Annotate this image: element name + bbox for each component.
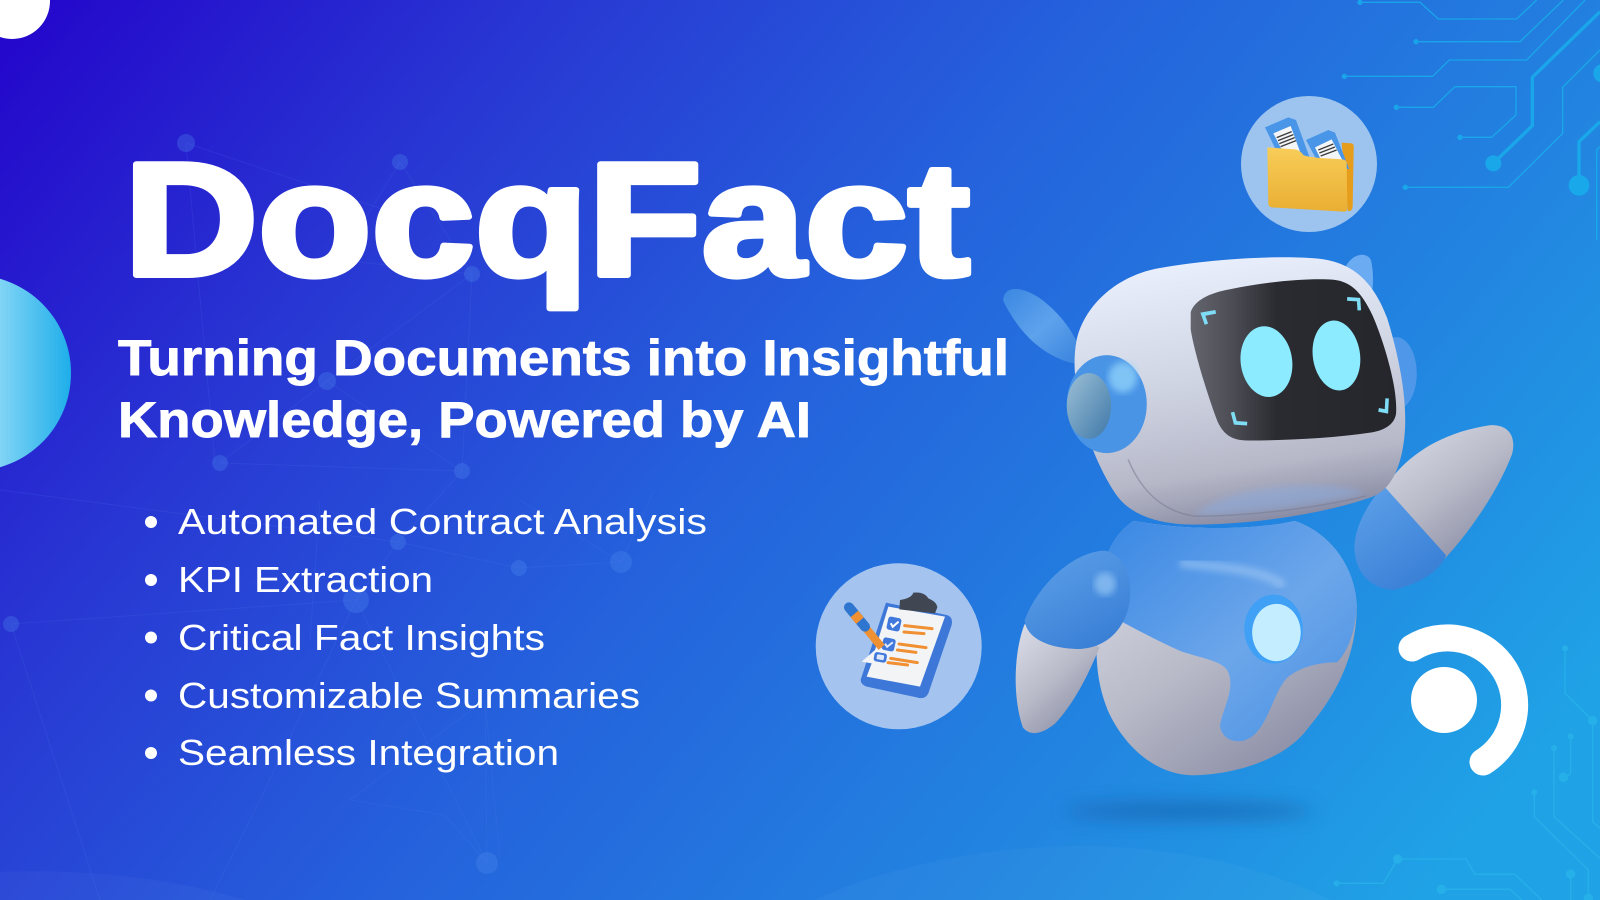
robot body — [1096, 521, 1357, 775]
icon: folder badge — [1241, 96, 1377, 232]
subtitle — [118, 330, 1009, 448]
robot eyes — [1235, 316, 1365, 401]
feature list: Seamless Integration — [178, 732, 559, 773]
feature list — [145, 501, 707, 773]
shadow under robot — [1064, 802, 1314, 820]
robot rear antenna — [1345, 255, 1373, 303]
circuit lines top right — [1342, 0, 1600, 240]
feature list: KPI Extraction — [178, 559, 433, 600]
feature list: Critical Fact Insights — [178, 617, 545, 658]
robot illustration — [1003, 255, 1513, 775]
bottom background waves — [0, 846, 1330, 900]
robot side ear — [1067, 355, 1147, 453]
robot rear ear — [1375, 337, 1417, 410]
decorative cyan circle — [0, 275, 71, 471]
icon: clipboard badge — [816, 563, 982, 729]
faint network pattern — [0, 143, 654, 900]
robot left arm — [1016, 551, 1130, 733]
circuit lines bottom right — [1334, 645, 1600, 900]
robot left antenna — [1003, 289, 1084, 365]
robot screen — [1191, 279, 1396, 440]
subtitle: Knowledge, Powered by AI — [118, 392, 811, 448]
robot chest light — [1244, 595, 1303, 664]
feature list: Automated Contract Analysis — [178, 501, 707, 542]
title: DocqFact — [124, 130, 970, 310]
white ring logo — [1411, 638, 1515, 762]
feature list: Customizable Summaries — [178, 675, 640, 716]
decorative white corner circle — [0, 0, 50, 39]
subtitle: Turning Documents into Insightful — [118, 330, 1009, 386]
robot right arm — [1354, 425, 1513, 590]
robot head — [1067, 257, 1405, 525]
